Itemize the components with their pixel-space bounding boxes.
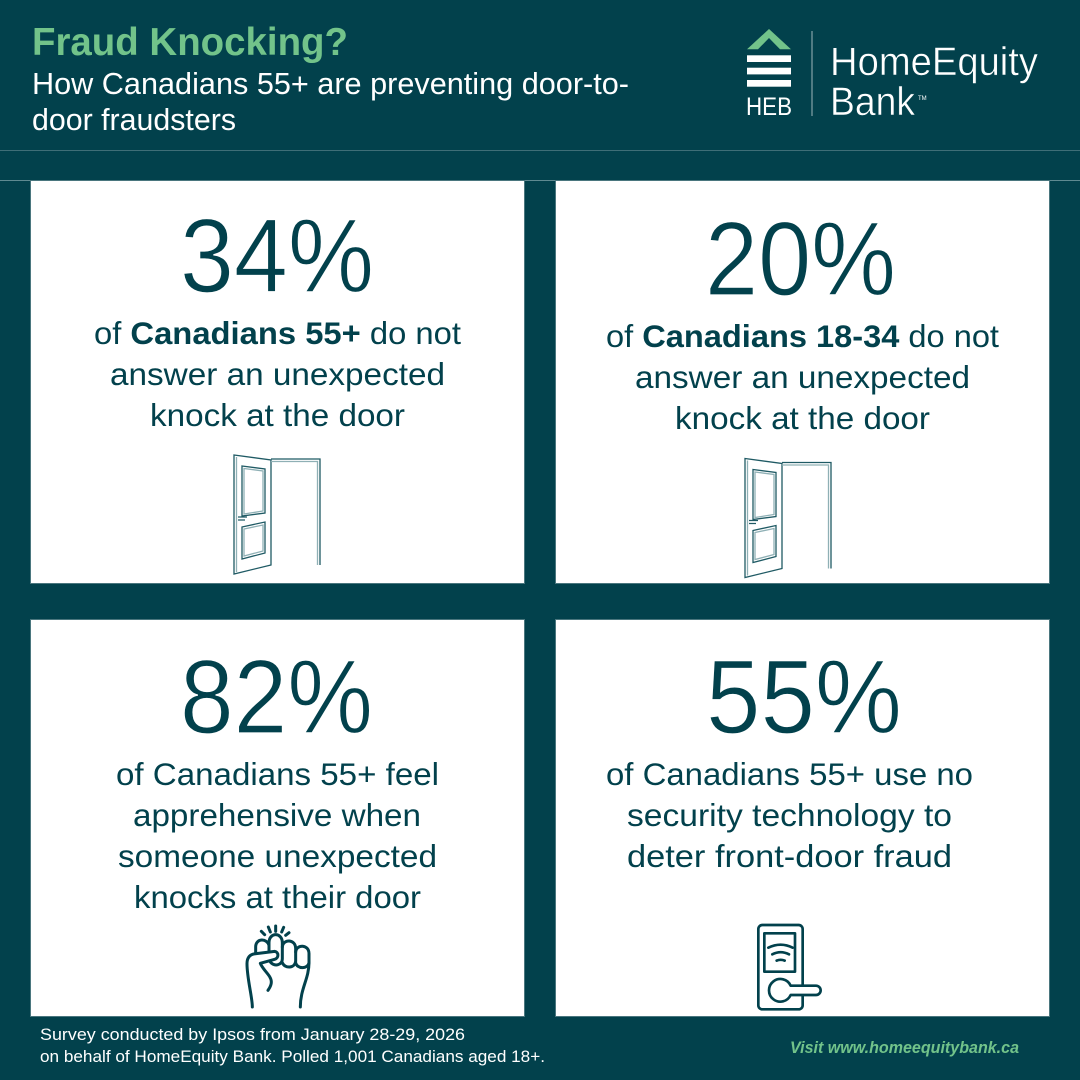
wordmark: HomeEquity: [830, 40, 1038, 84]
text block: knock at the door: [150, 397, 405, 433]
wordmark: Bank: [830, 80, 916, 124]
text block: [94, 315, 461, 433]
text block: of Canadians 55+ use no: [606, 756, 973, 792]
statistic: 34%: 34%: [180, 198, 374, 315]
text block: someone unexpected: [118, 838, 437, 874]
statistic: 55%: 55%: [706, 639, 902, 756]
footnote: survey source: Survey conducted by Ipsos from January 28-29, 2026: [40, 1025, 465, 1044]
text block: of Canadians 18-34 do not: [606, 318, 999, 354]
panel: 34% of Canadians 55+: [30, 180, 524, 584]
text block: knock at the door: [675, 400, 930, 436]
subtitle: door fraudsters: [32, 102, 236, 137]
text block: security technology to: [627, 797, 952, 833]
icon: open door: [234, 455, 320, 574]
statistic: 82%: 82%: [180, 639, 373, 756]
text block: answer an unexpected: [110, 356, 445, 392]
subtitle: [32, 66, 629, 137]
panel: 82% feel apprehensive: [30, 620, 524, 1016]
panel: 55% no security technology: [556, 620, 1050, 1016]
icon: open door: [745, 458, 831, 578]
text block: of Canadians 55+ feel: [116, 756, 439, 792]
icon: smart door lock: [758, 925, 821, 1009]
icon: house roof and bars: [746, 29, 792, 121]
text block: of Canadians 55+ do not: [94, 315, 461, 351]
footnote: survey source: on behalf of HomeEquity Bank. Polled 1,001 Canadians aged 18+.: [40, 1047, 545, 1066]
text block: answer an unexpected: [635, 359, 970, 395]
text block: [116, 756, 439, 915]
text block: [606, 756, 973, 874]
text block: knocks at their door: [134, 879, 421, 915]
text block: apprehensive when: [133, 797, 421, 833]
wordmark: TM: [918, 96, 927, 102]
wordmark: [830, 40, 1038, 124]
subtitle: How Canadians 55+ are preventing door-to-: [32, 66, 629, 101]
icon: house roof and bars: HEB: [746, 93, 792, 121]
icon: knocking fist: [247, 926, 309, 1007]
website link: Visit www.homeequitybank.ca: [790, 1038, 1019, 1057]
statistic: 20%: 20%: [705, 201, 896, 318]
text block: deter front-door fraud: [627, 838, 952, 874]
text block: [606, 318, 999, 436]
footnote: survey source: [40, 1025, 545, 1066]
title: Fraud Knocking?: [32, 21, 348, 64]
panel: 20% of Canadians 18-34: [556, 180, 1050, 584]
logo: HomeEquity Bank: [746, 29, 1038, 124]
